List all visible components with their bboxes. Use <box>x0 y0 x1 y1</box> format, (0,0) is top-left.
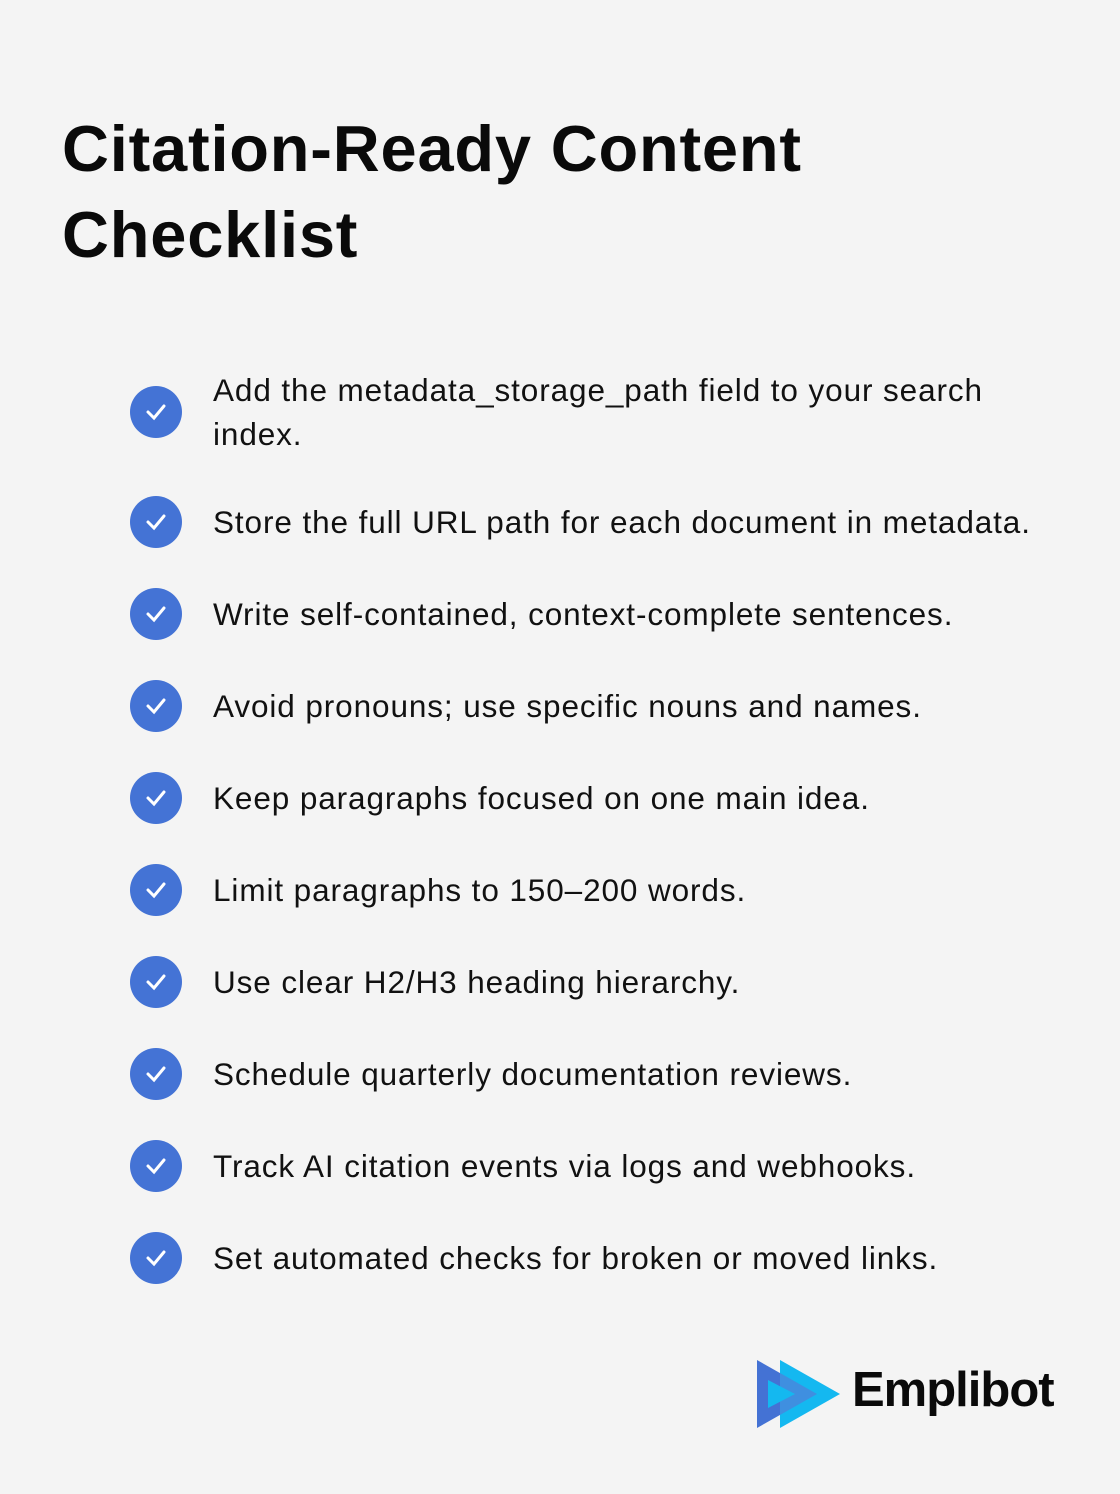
item 8 <box>130 1048 852 1100</box>
item 9 <box>130 1140 916 1192</box>
item 7: Use clear H2/H3 heading hierarchy. <box>213 964 740 1000</box>
item 4: Avoid pronouns; use specific nouns and names. <box>213 688 922 724</box>
item 7 <box>130 956 740 1008</box>
item 1: Add the metadata_storage_path field to your search <box>213 372 983 408</box>
item 3: Write self-contained, context-complete sentences. <box>213 596 953 632</box>
item 5 <box>130 772 870 824</box>
icon: play triangles <box>757 1360 840 1428</box>
item 10: Set automated checks for broken or moved links. <box>213 1240 938 1276</box>
item 4 <box>130 680 922 732</box>
item 2: Store the full URL path for each document in metadata. <box>213 504 1031 540</box>
title: Checklist <box>62 198 358 271</box>
title: Citation-Ready Content <box>62 112 802 185</box>
item 6 <box>130 864 746 916</box>
item 5: Keep paragraphs focused on one main idea. <box>213 780 870 816</box>
item 2 <box>130 496 1031 548</box>
item 6: Limit paragraphs to 150–200 words. <box>213 872 746 908</box>
item 10 <box>130 1232 938 1284</box>
item 8: Schedule quarterly documentation reviews. <box>213 1056 852 1092</box>
brand name: Emplibot <box>852 1363 1054 1417</box>
item 1 <box>130 372 983 452</box>
title <box>62 112 802 271</box>
item 3 <box>130 588 953 640</box>
item 9: Track AI citation events via logs and webhooks. <box>213 1148 916 1184</box>
logo <box>757 1360 1054 1428</box>
item 1: index. <box>213 416 302 452</box>
